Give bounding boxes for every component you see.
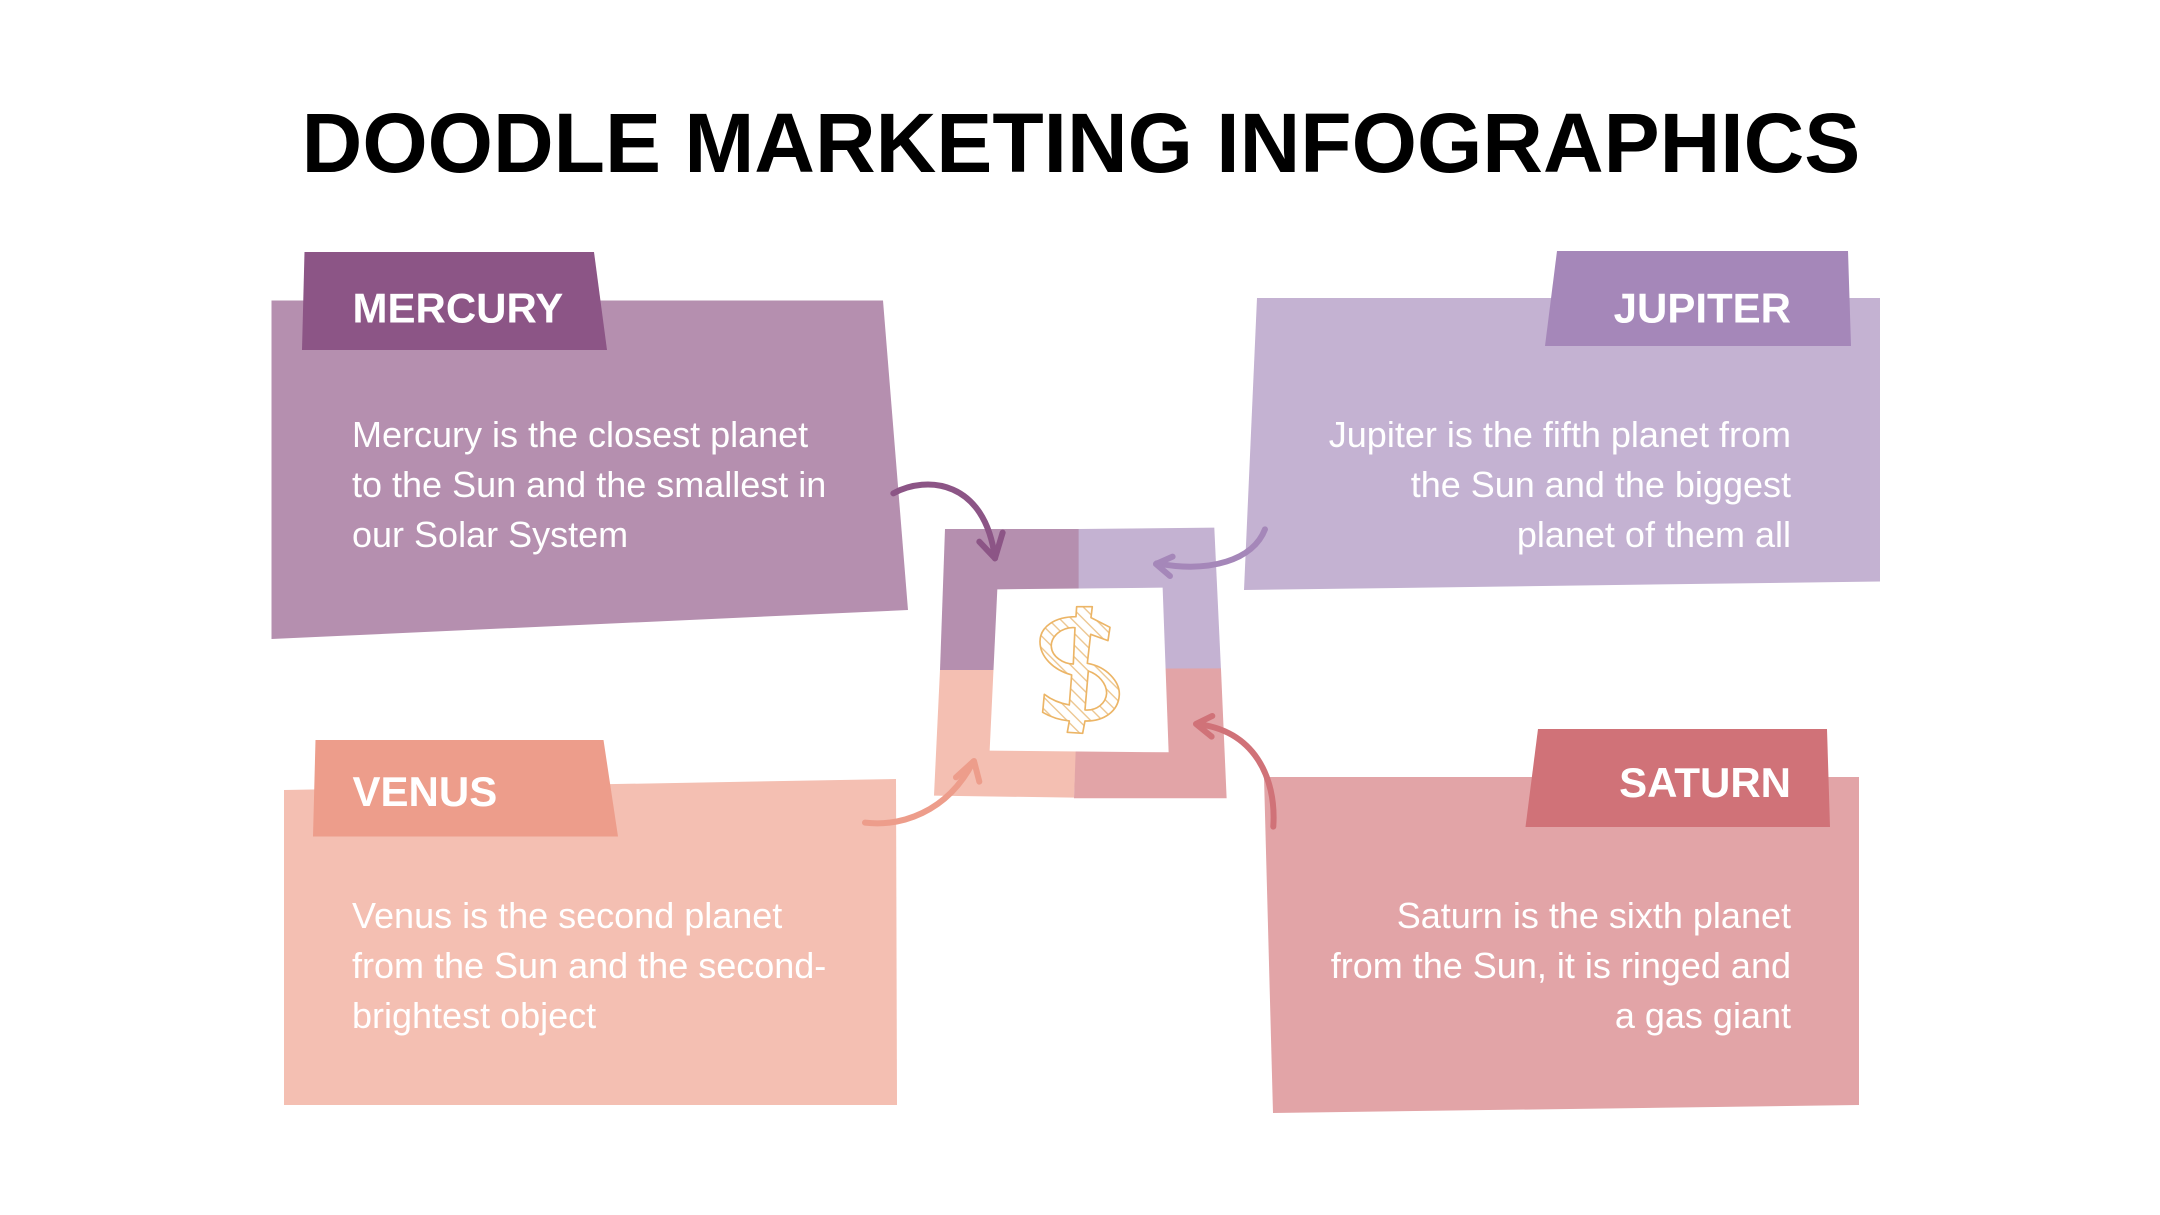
Saturn description: from the Sun, it is ringed and xyxy=(1331,945,1791,986)
Mercury description: our Solar System xyxy=(352,514,628,555)
central four-colour square xyxy=(934,528,1227,798)
Venus description: from the Sun and the second- xyxy=(352,945,826,986)
Venus heading tab xyxy=(313,740,618,836)
panel: Mercury xyxy=(272,252,908,639)
arrow: Saturn to centre xyxy=(1196,716,1274,827)
Mercury panel background xyxy=(272,300,908,639)
centre segment: Saturn xyxy=(1074,668,1227,798)
panel: Jupiter xyxy=(1244,251,1880,590)
centre white box xyxy=(990,588,1169,752)
centre segment: Venus xyxy=(934,670,1080,798)
Saturn panel background xyxy=(1264,777,1859,1113)
Saturn heading: SATURN xyxy=(1619,759,1791,806)
arrow: Mercury to centre xyxy=(893,484,1003,558)
panel: Venus xyxy=(284,740,897,1105)
Mercury description xyxy=(352,414,826,555)
Saturn heading tab xyxy=(1526,729,1830,827)
Saturn description: a gas giant xyxy=(1615,995,1791,1036)
Jupiter description xyxy=(1329,414,1791,555)
Jupiter heading: JUPITER xyxy=(1614,284,1791,332)
Venus panel background xyxy=(284,779,897,1105)
Venus description: Venus is the second planet xyxy=(352,895,782,936)
Mercury heading tab xyxy=(302,252,607,350)
centre segment: Mercury xyxy=(940,529,1079,671)
Mercury description: Mercury is the closest planet xyxy=(352,414,808,455)
Saturn description: Saturn is the sixth planet xyxy=(1397,895,1791,936)
Mercury heading: MERCURY xyxy=(352,284,563,332)
centre segment: Jupiter xyxy=(1079,528,1221,671)
arrow: Jupiter to centre xyxy=(1156,529,1265,576)
Jupiter description: the Sun and the biggest xyxy=(1411,464,1791,505)
arrow: Venus to centre xyxy=(865,761,979,823)
title: DOODLE MARKETING INFOGRAPHICS xyxy=(302,96,1860,190)
Jupiter description: planet of them all xyxy=(1517,514,1791,555)
Jupiter panel background xyxy=(1244,298,1880,590)
panel: Saturn xyxy=(1264,729,1859,1113)
Mercury description: to the Sun and the smallest in xyxy=(352,464,826,505)
Saturn description xyxy=(1331,895,1791,1036)
Venus description: brightest object xyxy=(352,995,596,1036)
Venus description xyxy=(352,895,826,1036)
icon: dollar sign xyxy=(1040,607,1119,733)
Jupiter heading tab xyxy=(1545,251,1851,346)
Jupiter description: Jupiter is the fifth planet from xyxy=(1329,414,1791,455)
Venus heading: VENUS xyxy=(352,768,497,815)
